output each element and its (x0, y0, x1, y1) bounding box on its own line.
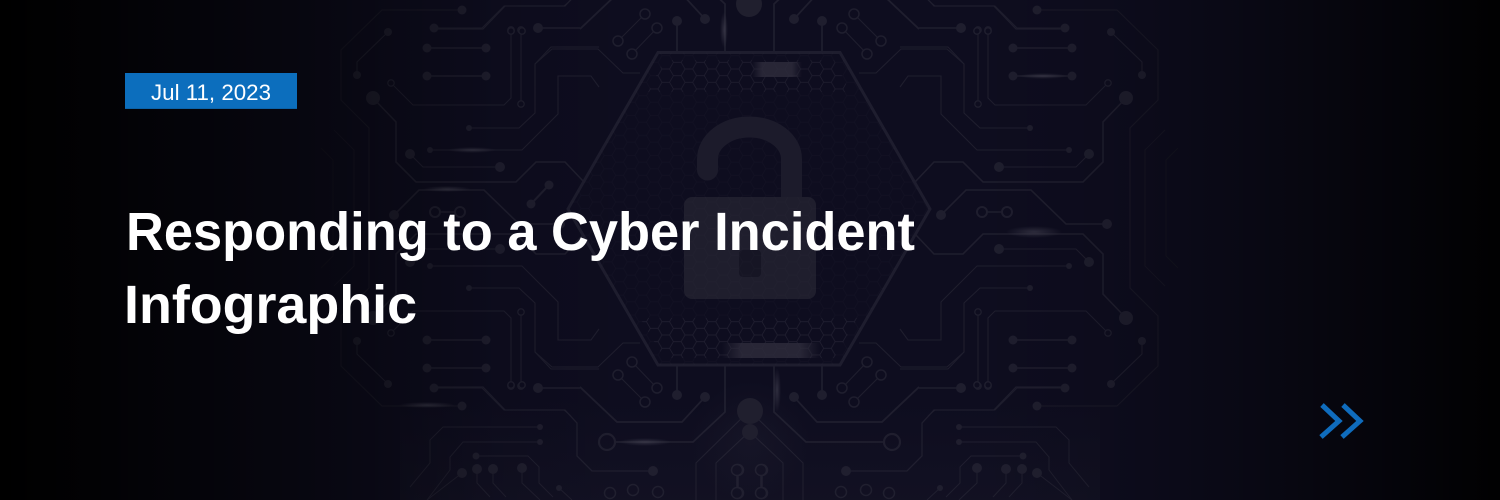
circuit traces: middle band, right and left (389, 180, 1112, 229)
date badge: Jul 11, 2023 (151, 80, 271, 105)
icon: double chevron arrow (1319, 403, 1364, 439)
bottom centre glow (400, 0, 1100, 500)
date badge (125, 73, 297, 109)
icon: open padlock (684, 127, 816, 299)
hexagon frame with honeycomb (568, 52, 930, 365)
light glints on traces (399, 12, 1067, 446)
title (124, 202, 915, 335)
circuit traces: four mirrored quadrants (321, 0, 1178, 500)
title: Responding to a Cyber Incident (126, 202, 915, 262)
title: Infographic (124, 275, 417, 335)
